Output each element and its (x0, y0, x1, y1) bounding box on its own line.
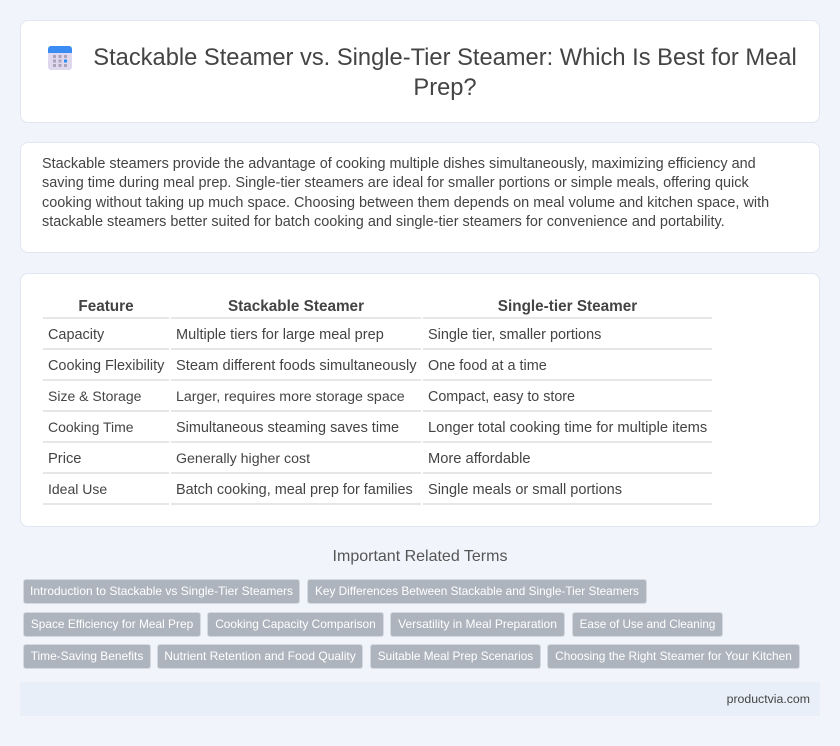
table row: cooking flexibility: One food at a time (428, 358, 547, 374)
tag: Suitable Meal Prep Scenarios (378, 649, 533, 663)
tag: Space Efficiency for Meal Prep (31, 617, 193, 631)
table row: size and storage: Compact, easy to store (428, 389, 575, 405)
tag: Ease of Use and Cleaning (580, 618, 715, 631)
table row: price: Price (48, 451, 81, 467)
table row: cooking time (48, 419, 707, 436)
tag: Choosing the Right Steamer for Your Kitchen (555, 649, 792, 663)
summary text: Stackable steamers provide the advantage of cooking multiple dishes simultaneously, maximizing efficiency and (42, 156, 756, 172)
table row: capacity: Single tier, smaller portions (428, 327, 601, 343)
summary text: cooking without taking up much space. Choosing between them depends on meal volume and kitchen space, with (42, 195, 769, 211)
tag (23, 612, 201, 637)
tag (370, 644, 541, 669)
table row: price: Generally higher cost (176, 451, 310, 467)
table row: price: More affordable (428, 451, 531, 467)
table row: price (48, 451, 531, 467)
heading: important related terms: Important Related Terms (333, 548, 507, 565)
footer bar (20, 682, 820, 716)
tag: Nutrient Retention and Food Quality (164, 649, 356, 663)
summary text (42, 156, 769, 230)
title: Stackable Steamer vs. Single-Tier Steamer: Which Is Best for Meal (93, 45, 797, 71)
tag: Key Differences Between Stackable and Single-Tier Steamers (315, 584, 639, 598)
table row: ideal use: Ideal Use (48, 481, 107, 497)
table row: ideal use: Single meals or small portions (428, 482, 622, 498)
table row: ideal use (48, 481, 622, 498)
tag (572, 612, 723, 637)
table row: cooking time: Cooking Time (48, 419, 134, 435)
table row: size and storage: Larger, requires more storage space (176, 389, 405, 405)
table row: capacity: Multiple tiers for large meal prep (176, 327, 384, 343)
table header: single-tier steamer: Single-tier Steamer (498, 298, 637, 315)
table header: stackable steamer: Stackable Steamer (228, 298, 364, 315)
table header: feature: Feature (78, 298, 134, 315)
panel: comparison table card (20, 273, 820, 527)
tag: Versatility in Meal Preparation (398, 617, 557, 631)
table row: size and storage (48, 388, 575, 405)
tag (207, 612, 384, 637)
table row: cooking flexibility: Cooking Flexibility (48, 358, 164, 374)
title: Prep? (413, 75, 477, 101)
source text: productvia.com (727, 692, 810, 706)
table row: capacity (48, 327, 601, 343)
tag (307, 579, 647, 604)
tag (390, 612, 565, 637)
tag: Time-Saving Benefits (31, 649, 143, 663)
table row: capacity: Capacity (48, 327, 104, 343)
tag (157, 644, 363, 669)
table row: cooking flexibility: Steam different foods simultaneously (176, 358, 417, 374)
tag (547, 644, 800, 669)
table row: cooking time: Longer total cooking time for multiple items (428, 420, 707, 436)
table row: size and storage: Size & Storage (48, 388, 141, 404)
title (93, 45, 797, 101)
tag (23, 644, 151, 669)
panel: title card (20, 20, 820, 123)
icon: calendar (48, 46, 72, 70)
tag: Introduction to Stackable vs Single-Tier Steamers (30, 584, 293, 598)
table row: cooking time: Simultaneous steaming saves time (176, 420, 399, 436)
related terms tags (23, 579, 800, 669)
tag: Cooking Capacity Comparison (215, 617, 376, 631)
panel: summary card (20, 142, 820, 253)
table row: cooking flexibility (48, 358, 547, 374)
summary text: saving time during meal prep. Single-tier steamers are ideal for smaller portions or simple meals, offering quick (42, 175, 749, 191)
summary text: stackable steamers better suited for batch cooking and single-tier steamers for convenience and portability. (42, 214, 725, 230)
tag (23, 579, 300, 604)
table row: ideal use: Batch cooking, meal prep for families (176, 482, 413, 498)
